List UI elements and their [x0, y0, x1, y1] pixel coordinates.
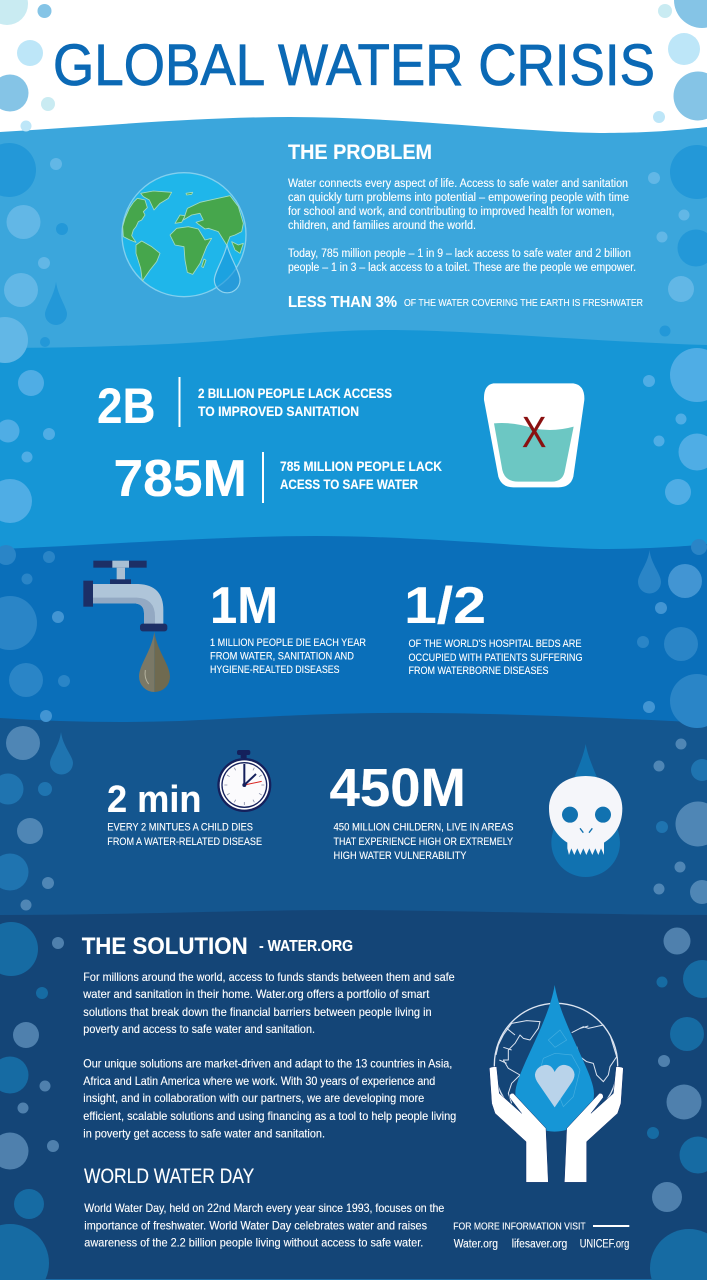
stat: 1/2: OCCUPIED WITH PATIENTS SUFFERING — [408, 652, 582, 664]
text block: solution description: For millions around the world, access to funds stands between them and safe — [83, 970, 455, 984]
text block: world water day: importance of freshwater. World Water Day celebrates water and raises — [84, 1218, 427, 1232]
stat: 450M — [330, 758, 514, 862]
callout: less than 3% — [288, 294, 643, 311]
title: GLOBAL WATER CRISIS — [53, 33, 655, 98]
stat: 1M: 1M — [210, 577, 278, 635]
stat: 2B: 2B — [97, 378, 156, 434]
stat: 785M: ACESS TO SAFE WATER — [280, 477, 418, 492]
stat: 2 min: FROM A WATER-RELATED DISEASE — [107, 836, 262, 848]
footer: more information links: Water.org — [454, 1239, 498, 1251]
text block: problem description: Today, 785 million people – 1 in 9 – lack access to safe water and 2 billion — [288, 248, 631, 260]
stat: 1M — [210, 577, 366, 676]
stat: 785M — [114, 450, 442, 508]
heading: the solution: THE SOLUTION — [82, 933, 248, 960]
stat: 450M: 450M — [330, 758, 466, 818]
footer: more information links — [453, 1220, 629, 1251]
icon: faucet with dirty drop — [83, 561, 170, 692]
panel: the problem — [122, 141, 643, 311]
text block: world water day — [84, 1201, 445, 1250]
heading: the solution: - WATER.ORG — [259, 938, 353, 955]
text block: solution description: poverty and access to safe water and sanitation. — [83, 1022, 315, 1036]
callout: less than 3%: OF THE WATER COVERING THE EARTH IS FRESHWATER — [404, 297, 643, 309]
icon: glass of water with X: X — [522, 408, 546, 457]
stat: 2 min — [107, 779, 262, 848]
stat: 1/2 — [404, 577, 582, 677]
stat: 450M: HIGH WATER VULNERABILITY — [334, 850, 467, 862]
footer: more information links: lifesaver.org — [512, 1239, 567, 1251]
text block: problem description: children, and families around the world. — [288, 220, 476, 232]
stat: 1M: FROM WATER, SANITATION AND — [210, 650, 354, 662]
text block: solution description — [82, 970, 456, 1140]
stat: 2 min: EVERY 2 MINTUES A CHILD DIES — [107, 822, 253, 834]
text block: world water day: World Water Day, held on 22nd March every year since 1993, focuses on the — [84, 1201, 445, 1215]
text block: solution description: solutions that break down the financial barriers between people living in — [83, 1005, 432, 1019]
panel: the solution — [82, 933, 629, 1251]
stat: 2B — [97, 377, 392, 434]
text block: solution description: water and sanitation in their home. Water.org offers a portfolio of smart — [82, 987, 430, 1001]
text block: solution description: in poverty get access to safe water and sanitation. — [83, 1126, 325, 1140]
text block: world water day: awareness of the 2.2 billion people living without access to safe water. — [84, 1236, 423, 1250]
stat: 1/2: 1/2 — [404, 577, 486, 635]
stat: 2B: TO IMPROVED SANITATION — [198, 404, 359, 419]
text block: solution description: Africa and Latin America where we work. With 30 years of experience and — [83, 1074, 435, 1088]
panel: child mortality statistics — [107, 744, 622, 877]
text block: solution description: insight, and in collaboration with our partners, we are developing more — [83, 1091, 425, 1105]
footer: more information links: UNICEF.org — [580, 1239, 629, 1251]
footer: more information links: FOR MORE INFORMATION VISIT — [453, 1220, 586, 1232]
heading: the problem: THE PROBLEM — [288, 141, 432, 164]
text block: problem description: can quickly turn problems into potential – empowering people with time — [288, 192, 629, 204]
text block: problem description: for school and work, and contributing to improved health for women, — [288, 206, 614, 218]
heading: the solution — [82, 933, 353, 960]
text block: problem description: Water connects every aspect of life. Access to safe water and sanitation — [288, 178, 628, 190]
panel: access statistics — [97, 377, 584, 508]
text block: problem description — [288, 178, 636, 274]
icon: hands holding globe and drop — [489, 985, 623, 1182]
stat: 785M: 785M — [114, 450, 247, 508]
icon: stopwatch clock — [217, 750, 271, 812]
stat: 1/2: OF THE WORLD'S HOSPITAL BEDS ARE — [408, 638, 582, 650]
stat: 2B: 2 BILLION PEOPLE LACK ACCESS — [198, 386, 392, 401]
heading: world water day: WORLD WATER DAY — [84, 1165, 254, 1188]
text block: solution description: Our unique solutions are market-driven and adapt to the 13 countries in Asia, — [83, 1056, 452, 1070]
stat: 2 min: 2 min — [107, 779, 202, 821]
text block: problem description: people – 1 in 3 – lack access to a toilet. These are the people we empower. — [288, 262, 636, 274]
stat: 1/2: FROM WATERBORNE DISEASES — [408, 665, 548, 677]
stat: 450M: THAT EXPERIENCE HIGH OR EXTREMELY — [334, 836, 514, 848]
stat: 450M: 450 MILLION CHILDERN, LIVE IN AREAS — [334, 822, 514, 834]
icon: glass of water with X — [484, 383, 584, 487]
stat: 1M: HYGIENE-REALTED DISEASES — [210, 664, 340, 676]
stat: 1M: 1 MILLION PEOPLE DIE EACH YEAR — [210, 637, 366, 649]
icon: globe with water drop — [122, 173, 246, 297]
icon: skull on water drop — [549, 744, 622, 877]
panel: health statistics — [83, 561, 583, 692]
text block: solution description: efficient, scalable solutions and using financing as a tool to help people living — [83, 1109, 456, 1123]
callout: less than 3%: LESS THAN 3% — [288, 294, 397, 311]
stat: 785M: 785 MILLION PEOPLE LACK — [280, 459, 442, 474]
